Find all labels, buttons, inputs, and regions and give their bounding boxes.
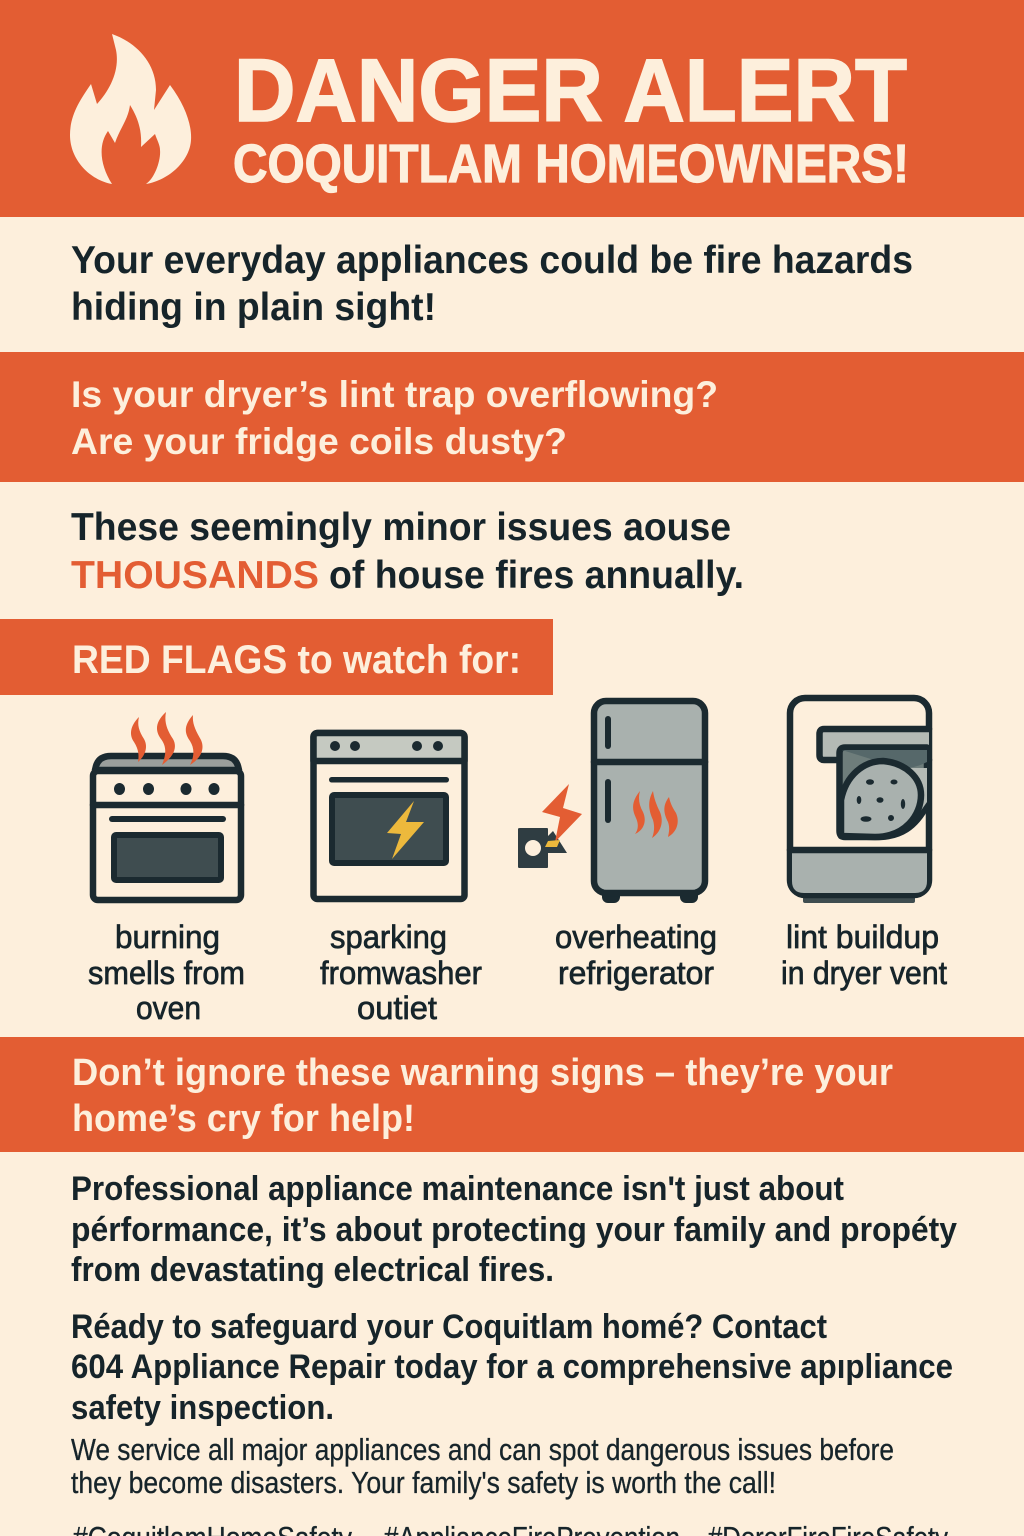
intro statement [71, 239, 913, 329]
subtitle: COQUITLAM HOMEOWNERS! [233, 134, 909, 194]
label: burning smells from oven: oven [136, 990, 201, 1026]
warning band: home’s cry for help! [72, 1098, 415, 1140]
header banner [0, 0, 1024, 217]
title: DANGER ALERT [234, 40, 907, 140]
service note [71, 1432, 894, 1500]
maintenance paragraph: pérformance, it’s about protecting your family and propéty [71, 1211, 957, 1249]
label: sparking fromwasher outiet: fromwasher [320, 955, 482, 991]
service note: they become disasters. Your family's safety is worth the call! [71, 1465, 776, 1500]
label: burning smells from oven: burning [115, 919, 220, 955]
call to action paragraph: safety inspection. [71, 1389, 334, 1427]
maintenance paragraph: from devastating electrical fires. [71, 1251, 554, 1289]
intro statement: hiding in plain sight! [71, 286, 436, 329]
label: lint buildup in dryer vent: in dryer vent [781, 955, 947, 991]
label: burning smells from oven [88, 919, 245, 1026]
label: sparking fromwasher outiet: outiet [357, 990, 437, 1026]
icon: flame [70, 34, 191, 184]
icon: sparking outlet [518, 784, 582, 868]
call to action paragraph [71, 1308, 953, 1427]
thousands statement: of house fires annually. [329, 554, 744, 597]
question band [0, 352, 1024, 482]
maintenance paragraph: Professional appliance maintenance isn't just about [71, 1170, 844, 1208]
label: burning smells from oven: smells from [88, 955, 245, 991]
icon: oven with burning smell [93, 712, 241, 900]
warning band [0, 1037, 1024, 1152]
hashtags [73, 1520, 948, 1536]
icon: dryer with lint buildup [790, 698, 929, 903]
question band: Is your dryer’s lint trap overflowing? [71, 374, 718, 415]
intro statement: Your everyday appliances could be fire hazards [71, 239, 913, 282]
thousands statement [71, 506, 744, 597]
label: lint buildup in dryer vent: lint buildup [786, 919, 939, 955]
icon: overheating refrigerator [594, 701, 705, 903]
red flags heading [0, 619, 553, 695]
warning band: Don’t ignore these warning signs – they’re your [72, 1052, 893, 1094]
label: overheating refrigerator: refrigerator [558, 955, 714, 991]
maintenance paragraph [71, 1170, 957, 1289]
call to action paragraph: 604 Appliance Repair today for a comprehensive apıpliance [71, 1348, 953, 1386]
call to action paragraph: Réady to safeguard your Coquitlam homé? Contact [71, 1308, 827, 1346]
thousands statement: THOUSANDS [71, 554, 319, 597]
icon: oven with spark [314, 733, 464, 899]
label: overheating refrigerator [555, 919, 717, 991]
service note: We service all major appliances and can spot dangerous issues before [71, 1432, 894, 1467]
question band: Are your fridge coils dusty? [71, 421, 567, 462]
red flags heading: RED FLAGS to watch for: [72, 638, 521, 682]
label: lint buildup in dryer vent [781, 919, 947, 991]
label: sparking fromwasher outiet [320, 919, 482, 1026]
thousands statement: These seemingly minor issues aouse [71, 506, 731, 549]
label: sparking fromwasher outiet: sparking [330, 919, 447, 955]
label: overheating refrigerator: overheating [555, 919, 717, 955]
